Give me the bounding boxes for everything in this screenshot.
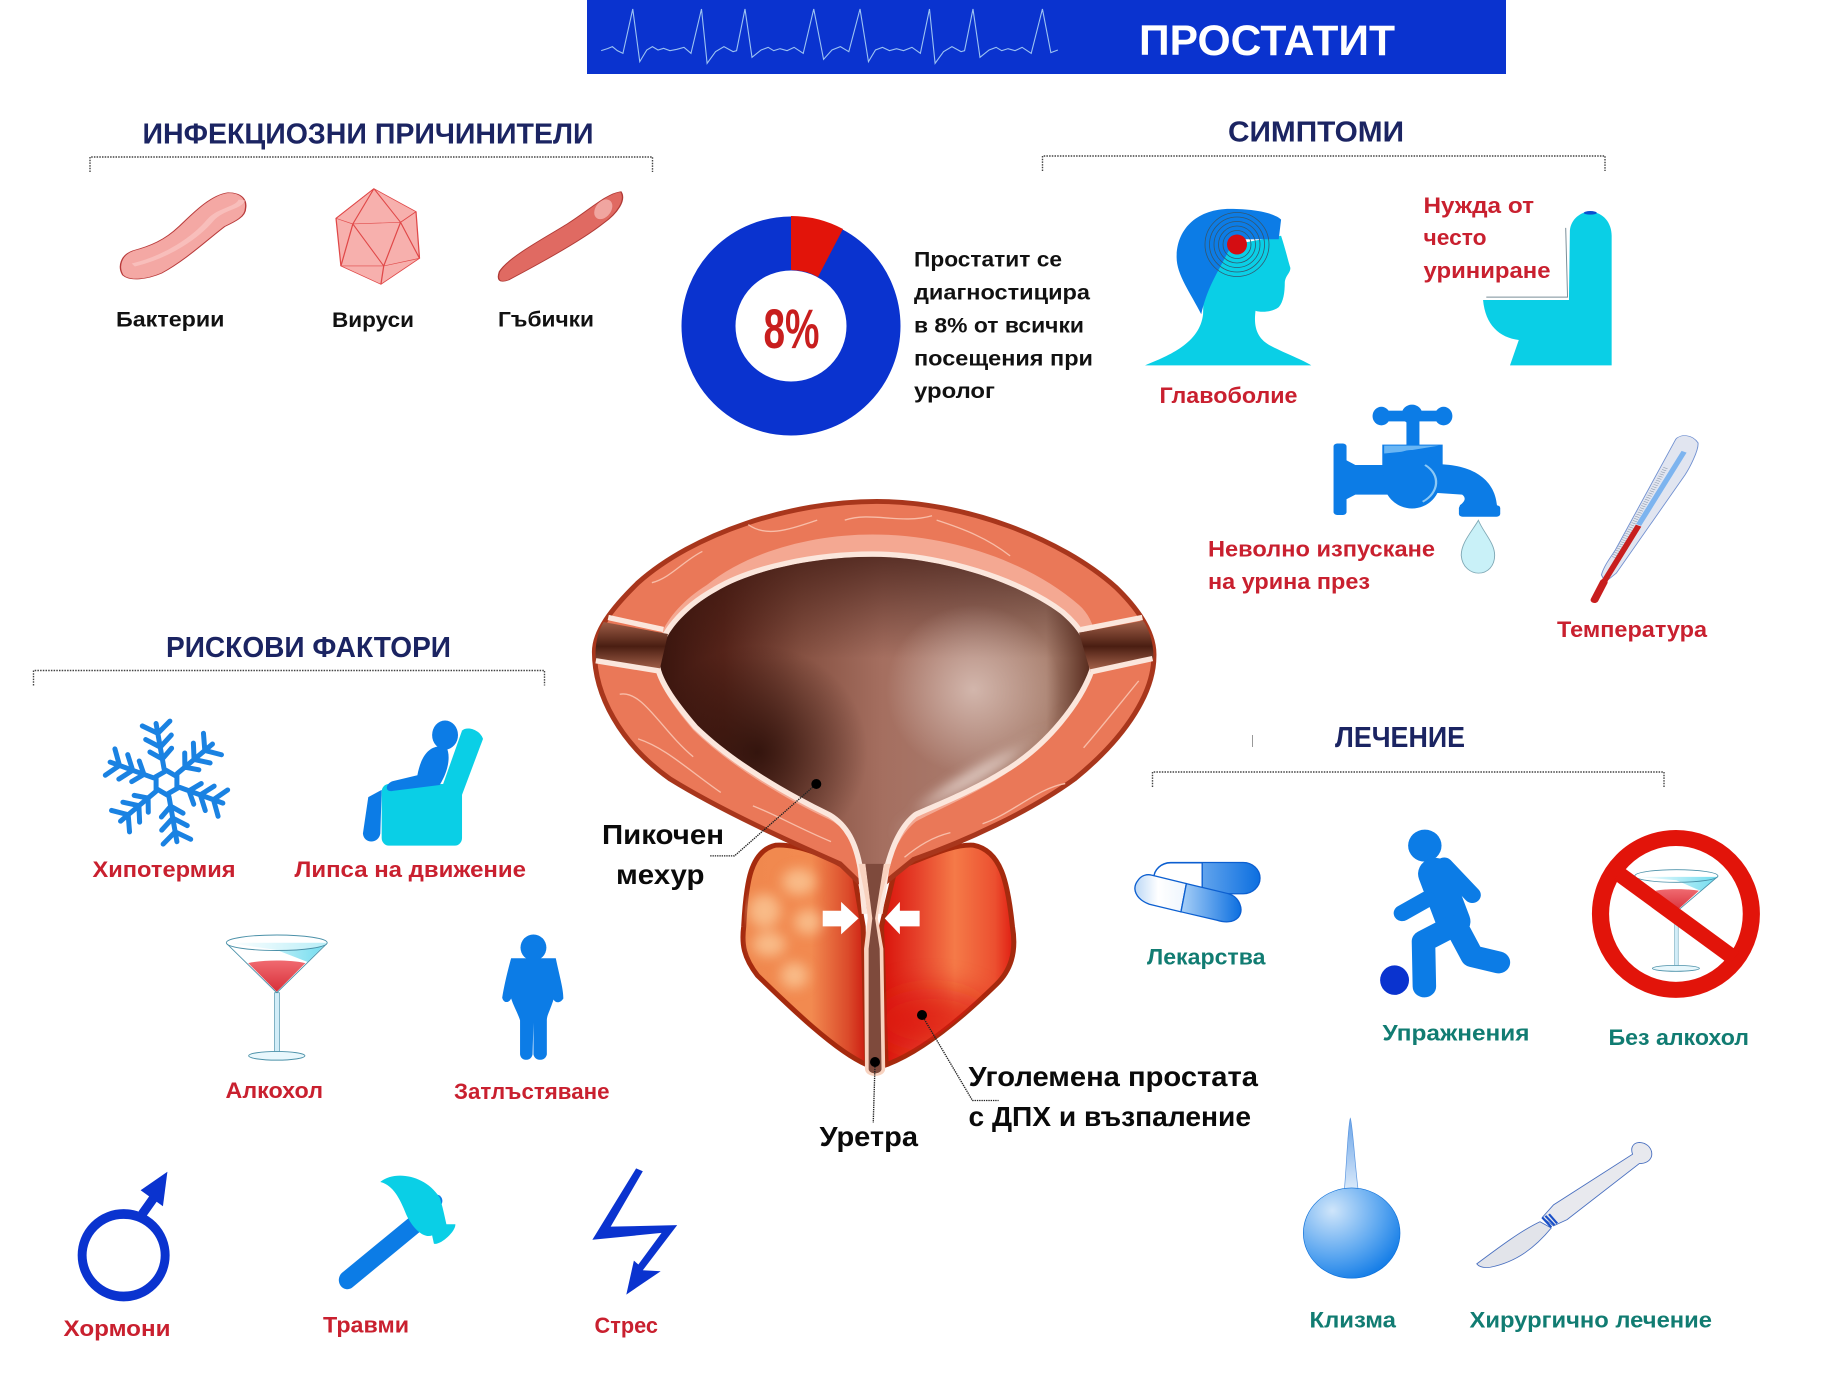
label: bacteria: Бактерии: [116, 308, 224, 332]
panel: treatment: [1135, 722, 1751, 1332]
icon: scalpel: [1477, 1142, 1652, 1267]
text block: donut description: уролог: [914, 380, 995, 403]
label: hypothermia: Хипотермия: [92, 857, 236, 882]
icon: headache: [1145, 209, 1311, 365]
heading: risk factors: РИСКОВИ ФАКТОРИ: [166, 632, 451, 664]
title text: ПРОСТАТИТ: [1139, 17, 1395, 65]
icon: no alcohol sign: [1601, 838, 1751, 990]
label: incontinence: [1208, 536, 1435, 594]
callout: bladder: [602, 779, 821, 890]
label: headache: Главоболие: [1160, 383, 1298, 408]
text block: donut description: диагностицира: [914, 282, 1090, 304]
icon: hammer: [347, 1176, 455, 1280]
label: surgical treatment: Хирургично лечение: [1470, 1308, 1712, 1332]
urethra and compression arrows: [823, 864, 920, 1076]
callout: enlarged prostate: с ДПХ и възпаление: [968, 1101, 1251, 1132]
icon: person in armchair: [363, 720, 483, 846]
icon: toilet: [1483, 211, 1612, 365]
text block: donut description: посещения при: [914, 348, 1093, 370]
label: incontinence: на урина през: [1208, 569, 1370, 594]
right arrow: [885, 902, 920, 934]
callout: bladder: Пикочен: [602, 819, 724, 850]
heading: infectious agents: ИНФЕКЦИОЗНИ ПРИЧИНИТЕЛИ: [142, 118, 594, 150]
label: fungi: Гъбички: [498, 308, 594, 332]
icon: bacteria: [120, 193, 246, 279]
label: alcohol: Алкохол: [226, 1078, 323, 1103]
icon: snowflake: [105, 721, 228, 844]
panel: risk factors: [34, 632, 677, 1341]
icon: faucet with drop: [1334, 405, 1500, 573]
text block: donut description: [914, 248, 1093, 403]
label: enema: Клизма: [1310, 1308, 1397, 1332]
label: frequent urination: уриниране: [1424, 258, 1550, 283]
icon: person kicking ball: [1380, 830, 1498, 995]
icon: virus: [336, 189, 419, 284]
text block: donut description: Простатит се: [914, 248, 1062, 272]
anatomy illustration: bladder and prostate: [594, 501, 1154, 1076]
panel: symptoms: [1042, 116, 1708, 642]
icon: enema bulb: [1303, 1118, 1400, 1278]
left arrow: [823, 902, 859, 934]
label: frequent urination: Нужда от: [1424, 193, 1534, 218]
label: obesity: Затлъстяване: [454, 1079, 610, 1104]
icon: lightning bolt: [592, 1168, 677, 1295]
label: fever: Температура: [1557, 617, 1708, 642]
label: frequent urination: често: [1424, 225, 1486, 250]
label: no alcohol: Без алкохол: [1608, 1025, 1749, 1050]
icon: obese figure: [502, 934, 563, 1060]
panel: infectious agents: [90, 118, 652, 332]
prostate: [743, 845, 1014, 1065]
label: frequent urination: [1424, 193, 1550, 283]
heading: symptoms: СИМПТОМИ: [1228, 116, 1404, 148]
callout: enlarged prostate: [917, 1010, 1258, 1132]
callout: urethra: [820, 1057, 918, 1152]
title banner: [587, 0, 1506, 74]
donut value: 8%: [764, 297, 820, 360]
donut chart: 8 percent: [708, 216, 874, 408]
ureters: [596, 622, 668, 670]
label: medication: Лекарства: [1147, 944, 1266, 970]
icon: fungus: [498, 192, 623, 281]
label: incontinence: Неволно изпускане: [1208, 536, 1435, 562]
callout: urethra: Уретра: [820, 1121, 918, 1152]
text block: donut description: в 8% от всички: [914, 314, 1084, 338]
icon: male symbol: [82, 1172, 167, 1297]
callout: enlarged prostate: Уголемена простата: [968, 1061, 1258, 1092]
icon: cocktail glass: [226, 935, 327, 1060]
ECG line: [601, 9, 1058, 63]
bladder: [594, 501, 1154, 917]
label: injuries: Травми: [323, 1312, 409, 1338]
label: lack of movement: Липса на движение: [294, 857, 526, 882]
label: viruses: Вируси: [332, 309, 414, 332]
label: stress: Стрес: [594, 1313, 658, 1338]
icon: thermometer: [1594, 436, 1698, 600]
label: hormones: Хормони: [64, 1316, 170, 1341]
heading: treatment: ЛЕЧЕНИЕ: [1335, 722, 1465, 754]
label: exercise: Упражнения: [1382, 1020, 1530, 1046]
callout: bladder: мехур: [616, 859, 704, 890]
icon: pills: [1135, 863, 1260, 922]
